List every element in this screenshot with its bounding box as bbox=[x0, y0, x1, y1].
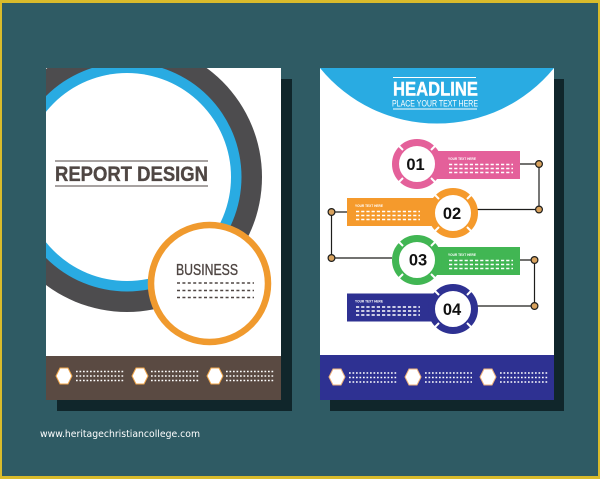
step 02: 02 bbox=[443, 205, 461, 223]
website url: www.heritagechristiancollege.com bbox=[40, 429, 200, 440]
step 02: YOUR TEXT HERE bbox=[355, 204, 383, 208]
headline block bbox=[392, 78, 478, 110]
concentric circle graphic bbox=[46, 68, 262, 312]
left footer band bbox=[46, 356, 281, 400]
headline block: PLACE YOUR TEXT HERE bbox=[392, 98, 478, 110]
headline block: HEADLINE bbox=[393, 78, 478, 100]
step 03: YOUR TEXT HERE bbox=[448, 253, 476, 257]
connector nodes bbox=[328, 161, 542, 309]
orange business circle bbox=[151, 225, 268, 342]
step 04: YOUR TEXT HERE bbox=[355, 300, 383, 304]
panel: right infographic page bbox=[320, 68, 564, 411]
panel: left report cover bbox=[46, 68, 292, 411]
business dotted text lines bbox=[177, 283, 254, 298]
business label: BUSINESS bbox=[176, 262, 238, 279]
footer item 2 bbox=[405, 369, 472, 385]
footer item 3 bbox=[480, 369, 549, 385]
right footer band bbox=[320, 355, 554, 400]
step 01 bbox=[396, 142, 520, 186]
footer item 1 bbox=[56, 368, 124, 384]
step 04 bbox=[347, 288, 474, 330]
right page shadow bbox=[330, 79, 564, 411]
step 03: 03 bbox=[409, 252, 427, 270]
footer item 2 bbox=[132, 368, 199, 384]
right page sheet bbox=[320, 68, 554, 400]
step 01: YOUR TEXT HERE bbox=[448, 157, 476, 161]
blue header cap bbox=[320, 68, 554, 124]
step 02 bbox=[347, 192, 474, 234]
step 03 bbox=[396, 238, 520, 282]
heading: report design: REPORT DESIGN bbox=[55, 163, 208, 186]
left page shadow bbox=[57, 79, 292, 411]
step 01: 01 bbox=[406, 156, 425, 174]
step 04: 04 bbox=[443, 301, 462, 319]
connector lines bbox=[332, 164, 539, 306]
footer item 1 bbox=[329, 369, 397, 385]
left page sheet bbox=[46, 68, 281, 400]
footer item 3 bbox=[207, 368, 275, 384]
